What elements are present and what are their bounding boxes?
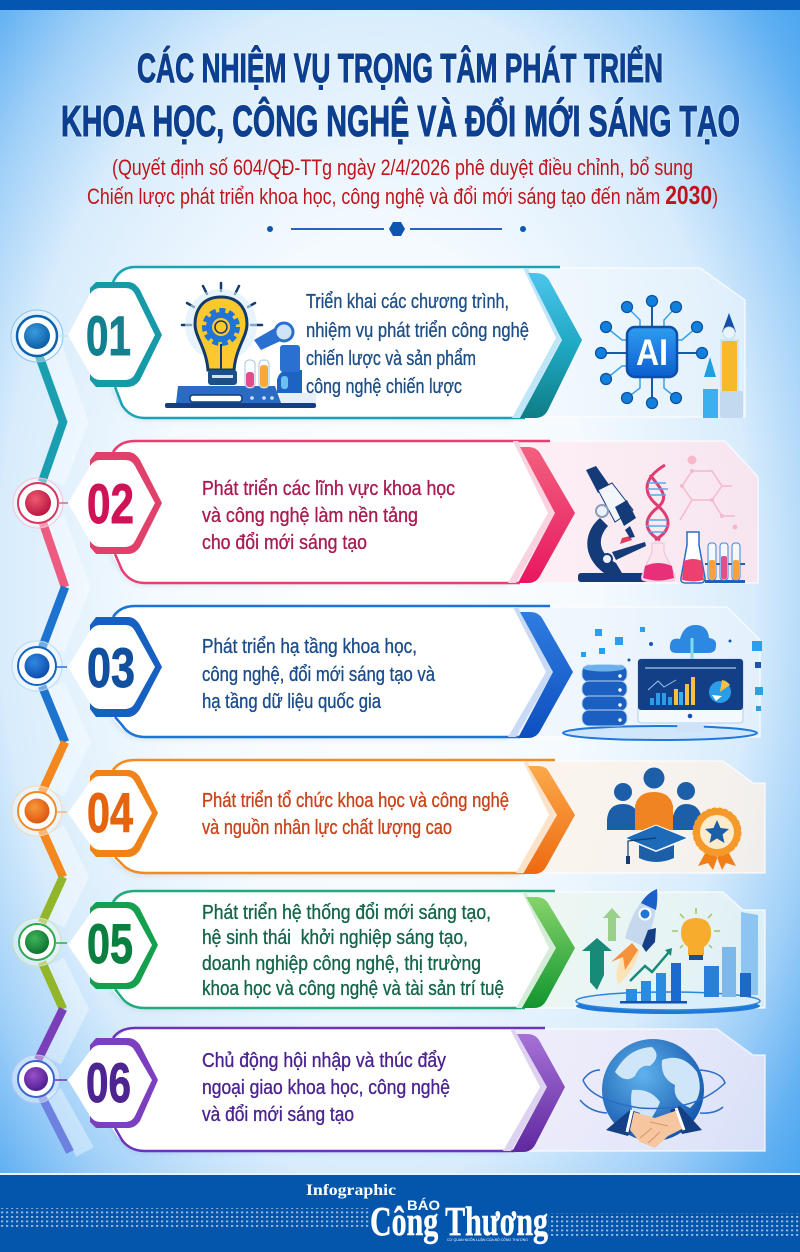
footer band	[0, 1173, 800, 1252]
text: task 03: hạ tầng dữ liệu quốc gia	[202, 691, 382, 713]
number hexagon 02: 02	[87, 472, 134, 535]
text: task 05: khoa học và công nghệ và tài sản trí tuệ	[202, 978, 504, 1000]
text: task 02	[202, 478, 455, 554]
title divider	[267, 222, 526, 236]
logo: Báo Công Thương: BÁO	[407, 1197, 440, 1213]
text: task 01: nhiệm vụ phát triển công nghệ	[306, 320, 529, 342]
footer dot pattern	[0, 1208, 800, 1237]
text: task 04: và nguồn nhân lực chất lượng cao	[202, 817, 452, 839]
text: task 06: ngoại giao khoa học, công nghệ	[202, 1077, 450, 1099]
panel 01 white card	[112, 268, 562, 418]
text: task 04	[202, 790, 509, 839]
text: task 01: công nghệ chiến lược	[306, 376, 462, 398]
text: task 05: hệ sinh thái khởi nghiệp sáng tạo,	[202, 927, 468, 949]
logo: Báo Công Thương: CƠ QUAN NGÔN LUẬN CỦA BỘ CÔNG THƯƠNG	[447, 1237, 528, 1242]
panel 02 chevron	[508, 441, 555, 583]
text: task 06	[202, 1050, 450, 1126]
timeline node 02	[13, 478, 68, 528]
text: task 01	[306, 291, 529, 398]
icon: light bulb and robot arm	[165, 283, 316, 408]
panel 05 background	[500, 892, 765, 1008]
panel 02 outline	[113, 441, 550, 583]
timeline node 03	[12, 641, 67, 691]
panel 04 background	[500, 761, 765, 873]
number hexagon 01: 01	[86, 304, 131, 367]
subtitle	[87, 155, 718, 210]
number hexagon 03: 03	[87, 636, 135, 699]
text: task 06: Chủ động hội nhập và thúc đẩy	[202, 1050, 446, 1072]
panel 04 white card	[112, 761, 556, 873]
footer label: Infographic	[306, 1182, 396, 1199]
text: task 05	[202, 902, 504, 1000]
panel 06 white card	[112, 1029, 547, 1151]
text: task 02: cho đổi mới sáng tạo	[202, 532, 367, 554]
panel 02 background	[500, 441, 758, 583]
panel: task 01	[11, 267, 745, 418]
panel: task 05	[13, 889, 765, 1014]
panel: task 04	[12, 760, 765, 874]
panel 06 background	[500, 1029, 765, 1151]
timeline node 05	[13, 918, 67, 966]
text: task 02: Phát triển các lĩnh vực khoa học	[202, 478, 455, 500]
icon: rocket, growth chart and city	[576, 889, 760, 1014]
text: task 03	[202, 636, 436, 713]
panel 03 white card	[112, 607, 553, 737]
panel: task 03	[12, 606, 763, 740]
icon: database, monitor and cloud	[563, 625, 763, 740]
panel 04 chevron	[516, 761, 556, 873]
icon: AI chip	[596, 296, 743, 418]
timeline connector	[37, 340, 85, 1152]
text: task 06: và đổi mới sáng tạo	[202, 1104, 354, 1126]
panel 03 outline	[113, 606, 550, 737]
subtitle: Chiến lược phát triển khoa học, công nghệ và đổi mới sáng tạo đến năm 2030)	[87, 180, 718, 210]
panel 05 chevron	[516, 892, 556, 1008]
number hexagon 04: 04	[87, 781, 133, 844]
timeline node 06	[12, 1055, 67, 1103]
text: task 03: Phát triển hạ tầng khoa học,	[202, 636, 417, 658]
timeline node 04	[12, 786, 67, 836]
panel 05 outline	[113, 891, 555, 1008]
number hexagon 01	[68, 282, 162, 387]
title	[61, 44, 740, 146]
text: task 01: Triển khai các chương trình,	[306, 291, 509, 313]
text: task 03: công nghệ, đổi mới sáng tạo và	[202, 664, 436, 686]
panel 03 background	[500, 607, 760, 737]
panel 06 outline	[113, 1028, 545, 1151]
panel 06 chevron	[503, 1029, 547, 1151]
text: task 01: chiến lược và sản phẩm	[306, 348, 476, 370]
text: task 05: Phát triển hệ thống đổi mới sáng tạo,	[202, 902, 491, 924]
logo: Báo Công Thương: Công Thương	[370, 1198, 548, 1244]
panel 03 chevron	[508, 607, 553, 737]
number hexagon 06: 06	[86, 1051, 131, 1114]
panel: task 06	[12, 1028, 765, 1152]
icon: AI chip: AI	[636, 332, 668, 373]
number hexagon 05: 05	[87, 912, 133, 975]
panel: task 02	[13, 441, 758, 583]
panel 05 white card	[112, 892, 556, 1008]
text: task 05: doanh nghiệp công nghệ, thị trường	[202, 953, 481, 975]
text: task 02: và công nghệ làm nền tảng	[202, 505, 418, 527]
panel 01 chevron	[512, 268, 562, 418]
text: task 04: Phát triển tổ chức khoa học và công nghệ	[202, 790, 509, 812]
icon: people, cap and medal	[607, 768, 741, 870]
number hexagon 06	[68, 1038, 158, 1128]
top band	[0, 0, 800, 10]
panel 01 outline	[113, 267, 560, 418]
number hexagon 02	[68, 452, 162, 554]
number hexagon 03	[68, 617, 162, 717]
number hexagon 05	[68, 902, 158, 989]
panel 01 background	[500, 268, 745, 417]
number hexagon 04	[68, 770, 158, 857]
icon: microscope, DNA and flasks	[578, 456, 745, 583]
panel 04 outline	[113, 760, 555, 873]
panel 02 white card	[112, 441, 555, 583]
timeline node 01	[11, 310, 68, 362]
icon: globe and handshake	[580, 1039, 725, 1148]
